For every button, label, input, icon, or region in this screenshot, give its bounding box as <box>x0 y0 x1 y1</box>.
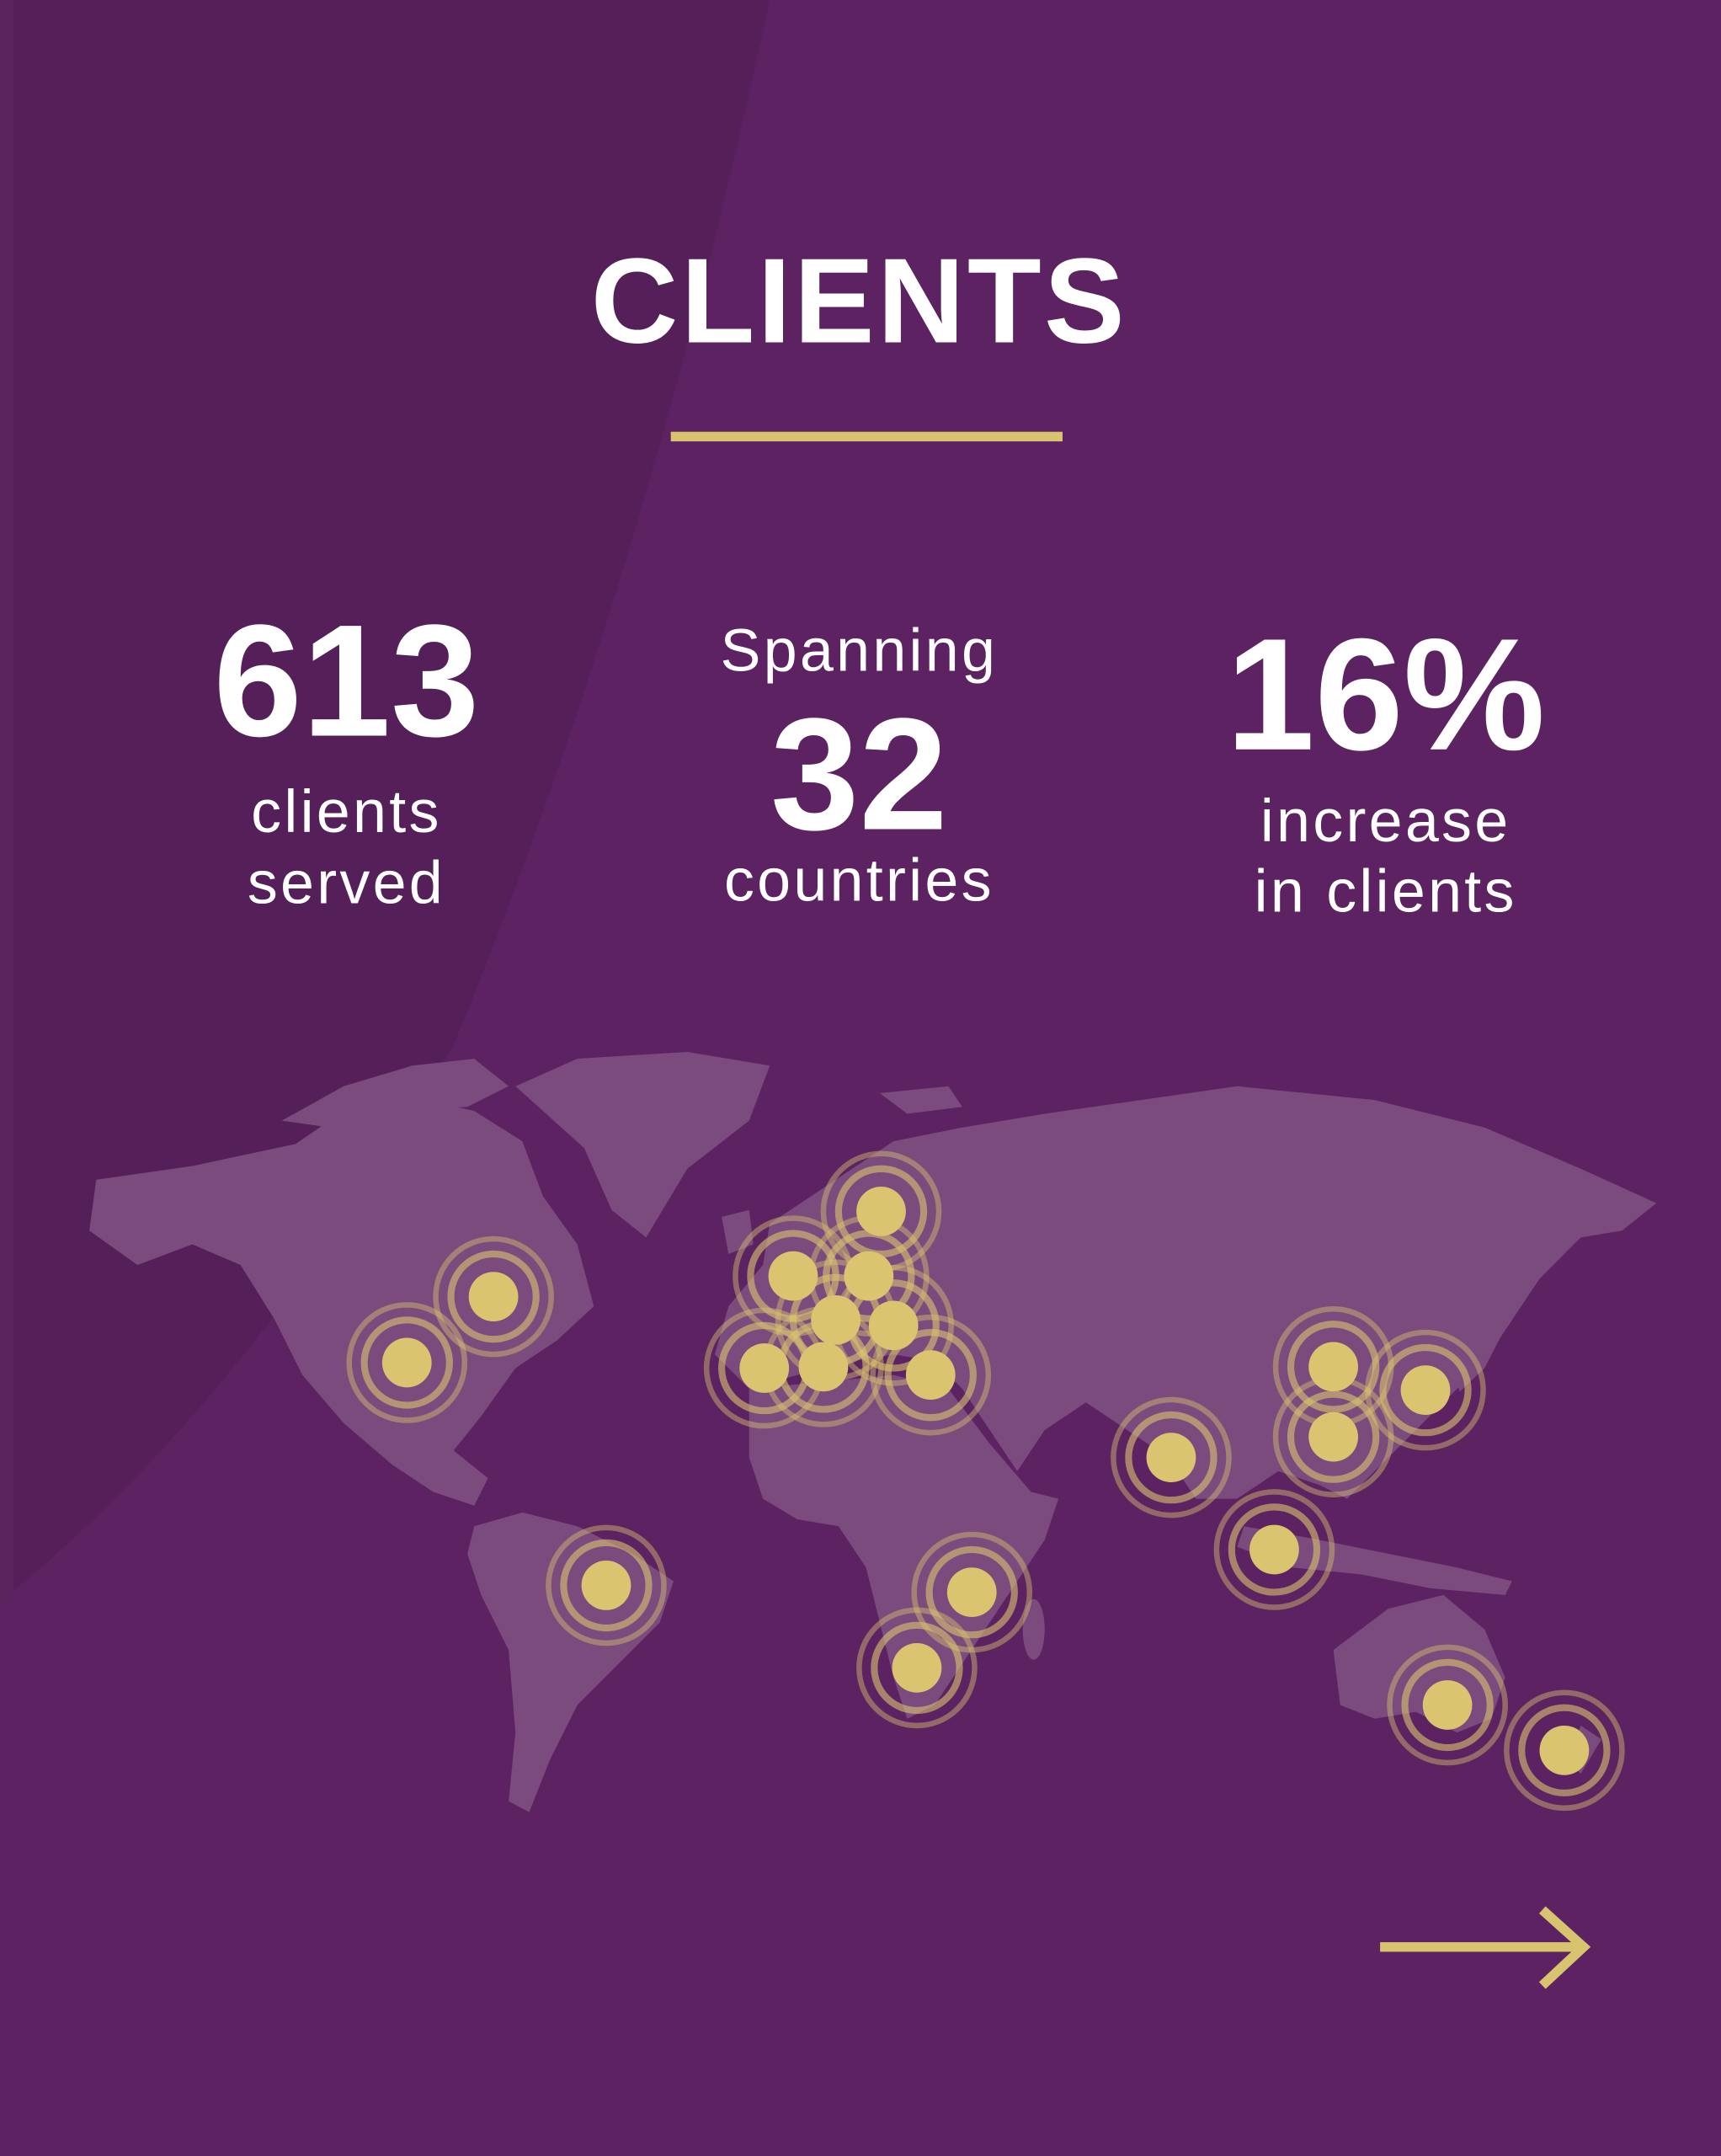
title: CLIENTS <box>591 234 1127 369</box>
stat: 613 clients served: served <box>248 850 445 917</box>
stat: spanning 32 countries <box>721 617 998 914</box>
stat: 613 clients served <box>213 592 479 917</box>
stat: 16% increase: increase <box>1260 787 1511 855</box>
stat: 613 clients served: clients <box>251 778 442 846</box>
stat: 16% increase <box>1226 606 1545 925</box>
stat: spanning 32 countries: 32 <box>770 686 948 864</box>
stat: 16% increase: in clients <box>1255 857 1517 925</box>
location markers <box>349 1154 1622 1808</box>
stat: 16% increase: 16% <box>1226 606 1545 784</box>
stat: spanning 32 countries: countries <box>724 846 994 914</box>
world map <box>89 1052 1656 1812</box>
stat: 613 clients served: 613 <box>213 592 479 770</box>
arrow <box>1380 1910 1584 1986</box>
stat: spanning 32 countries: Spanning <box>721 617 998 685</box>
